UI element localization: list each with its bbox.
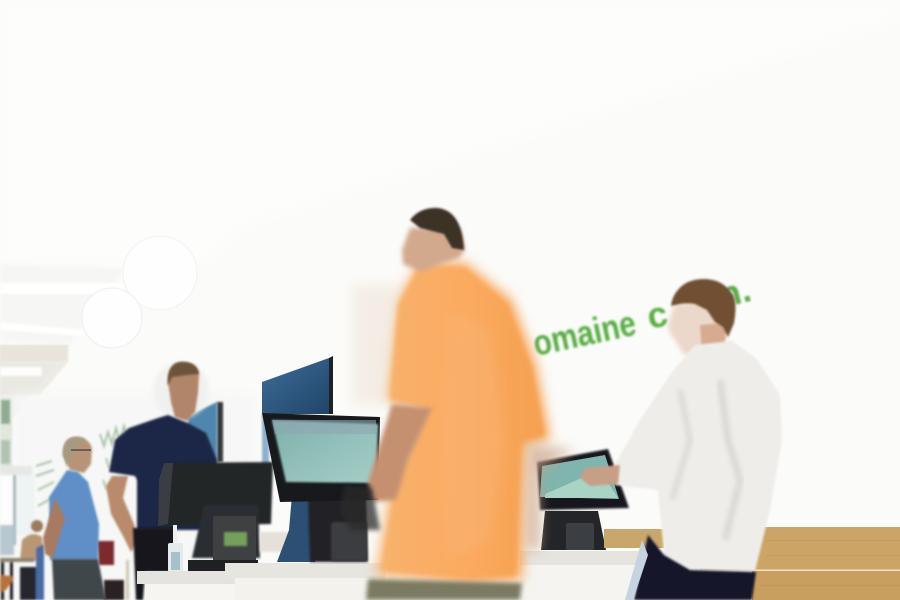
person: staff in navy polo: [106, 362, 217, 600]
wall slogan in green: omaine: [529, 302, 639, 364]
kiosk: centre terminal: [262, 413, 380, 562]
wall slogan in green: [529, 268, 755, 364]
pendant lamps: [82, 236, 197, 348]
counter: left desk: [137, 532, 385, 600]
kiosk: right terminal: [537, 449, 629, 550]
left window and entrance: [0, 398, 34, 555]
person: man in white shirt: [580, 279, 782, 600]
wall slogan in green: c: [643, 293, 671, 337]
green wall lettering in distance: [36, 426, 128, 506]
seated customers at left: [0, 520, 129, 600]
counter: right desk: [520, 551, 641, 600]
person: motion-blurred man in orange shirt: [340, 208, 575, 600]
wall TV screens: [188, 356, 333, 464]
wood panelling on wall: [604, 527, 900, 600]
wall slogan in green: n.: [714, 268, 755, 316]
person: man in blue polo: [43, 437, 106, 600]
kiosk: left terminal: [158, 462, 273, 574]
